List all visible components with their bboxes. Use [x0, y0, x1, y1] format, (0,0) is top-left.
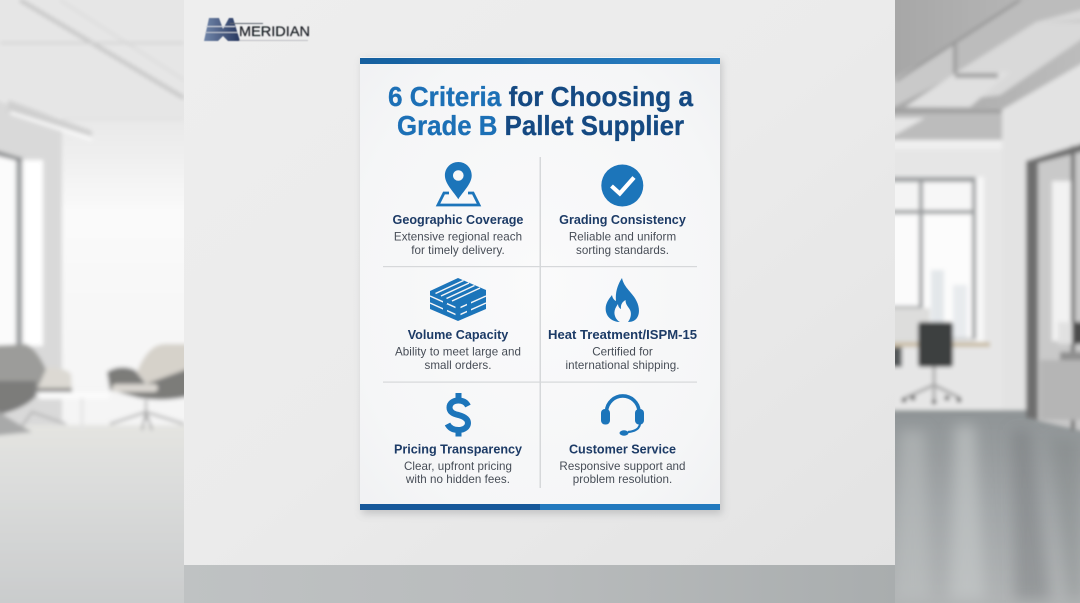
panel shadow	[362, 60, 722, 514]
cell: volume capacity	[395, 278, 521, 372]
description	[394, 230, 522, 257]
title	[388, 81, 694, 141]
icon: headset	[601, 396, 644, 436]
icon: pallet stack	[430, 278, 486, 321]
description: Reliable and uniform	[569, 230, 676, 244]
heading: Customer Service	[569, 442, 676, 456]
icon: check circle	[601, 164, 643, 206]
icon: map pin	[438, 162, 479, 205]
top bar	[360, 58, 720, 64]
grid dividers	[383, 157, 697, 488]
cell: grading consistency	[559, 164, 686, 257]
bottom bar	[360, 504, 720, 510]
background: wall	[184, 0, 895, 565]
cell: geographic coverage	[393, 162, 523, 257]
description	[404, 460, 512, 486]
description: for timely delivery.	[411, 244, 505, 257]
heading: Grading Consistency	[559, 213, 686, 227]
description	[569, 230, 676, 257]
panel: criteria poster	[360, 57, 720, 510]
logo: Meridian	[204, 18, 310, 41]
description	[566, 346, 679, 372]
background: right floor reflections	[895, 425, 1080, 600]
description: Clear, upfront pricing	[404, 460, 512, 473]
heading: Volume Capacity	[408, 328, 508, 342]
description: Certified for	[592, 346, 653, 358]
title: 6 Criteria for Choosing a	[388, 81, 694, 112]
logo wordmark: MERIDIAN	[239, 23, 310, 39]
description	[559, 460, 686, 486]
heading: Geographic Coverage	[393, 213, 523, 227]
icon: flame	[606, 278, 639, 322]
description: with no hidden fees.	[405, 473, 510, 486]
cell: heat treatment	[548, 278, 697, 372]
heading: Pricing Transparency	[394, 442, 522, 456]
title: Grade B Pallet Supplier	[397, 110, 684, 141]
heading: Heat Treatment/ISPM-15	[548, 328, 697, 342]
icon: dollar sign	[448, 393, 468, 436]
background: office right side	[888, 0, 1080, 603]
description: Ability to meet large and	[395, 346, 521, 358]
background: floor strip	[184, 565, 895, 603]
description: problem resolution.	[573, 473, 672, 486]
description: Responsive support and	[559, 460, 686, 473]
background: office left side	[0, 0, 190, 603]
description: international shipping.	[566, 359, 679, 372]
description: sorting standards.	[576, 244, 669, 257]
cell: pricing transparency	[394, 393, 522, 486]
cell: customer service	[559, 396, 686, 486]
description: small orders.	[424, 359, 492, 372]
description	[395, 346, 521, 372]
description: Extensive regional reach	[394, 230, 522, 244]
logo mark	[204, 18, 240, 41]
